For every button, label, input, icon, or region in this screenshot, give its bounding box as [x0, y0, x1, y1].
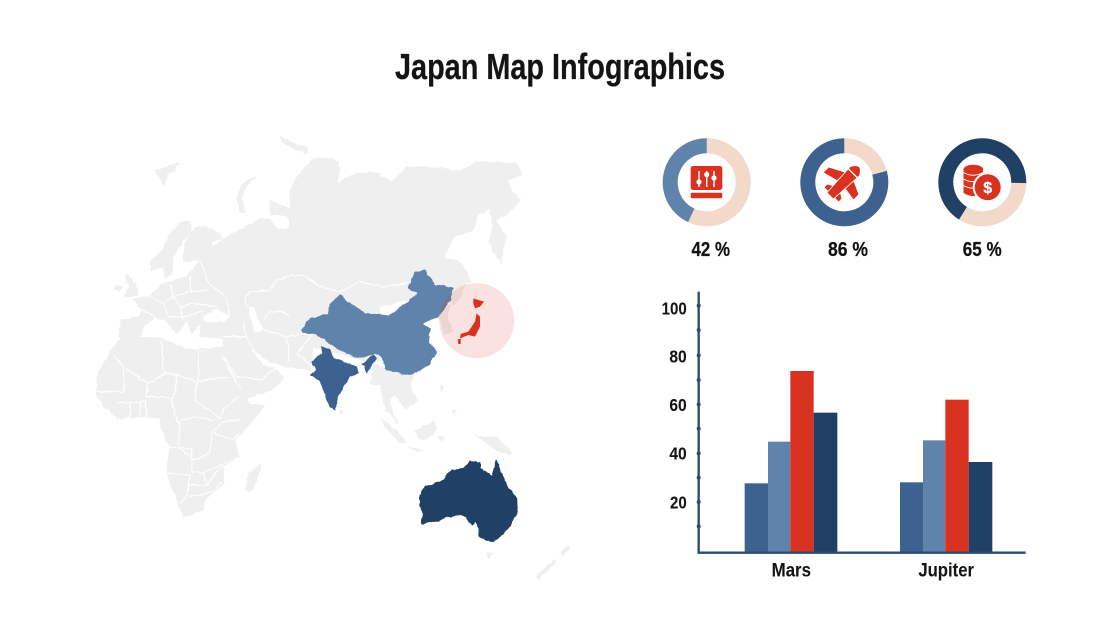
icon: sliders — [691, 166, 722, 198]
map: highlight circle around Japan — [439, 283, 514, 358]
map: Japan — [458, 298, 484, 344]
y axis labels: 80 — [669, 346, 687, 366]
label: 86 %: 86 % — [828, 239, 868, 261]
donut: 65 % — [932, 132, 1033, 233]
y axis labels: 40 — [669, 444, 687, 464]
donut: 42 % — [658, 134, 755, 231]
borders — [142, 260, 380, 380]
map: China — [302, 271, 452, 375]
x axis labels: Mars — [772, 561, 811, 582]
y axis labels: 60 — [669, 395, 687, 415]
label: 65 %: 65 % — [963, 239, 1002, 261]
map: grey land of Africa — [97, 337, 265, 517]
map: grey land of South-East Asia — [338, 362, 418, 420]
title: Japan Map Infographics — [395, 46, 725, 87]
icon: plane — [815, 152, 873, 209]
map: grey land of Europe and Asia — [115, 137, 380, 398]
y axis labels — [662, 298, 687, 512]
map: Australia — [420, 461, 517, 542]
seas cut out of the land — [203, 307, 263, 333]
map: India — [310, 347, 377, 410]
y axis labels: 20 — [670, 492, 687, 512]
x axis labels: Jupiter — [918, 561, 974, 582]
world map — [97, 137, 570, 579]
bars: Jupiter — [900, 400, 992, 552]
axes — [697, 292, 1026, 553]
map: grey islands of Indonesia, Philippines, New Guinea, New Zealand — [380, 380, 570, 579]
map: grey land of East Asia and Russia's far east — [290, 143, 522, 334]
label: 42 %: 42 % — [692, 239, 730, 261]
icon text: dollar sign: $ — [983, 180, 992, 197]
bar chart — [662, 292, 1026, 582]
bars: Mars — [745, 371, 837, 552]
x axis labels — [772, 561, 974, 582]
y axis labels: 100 — [662, 298, 687, 318]
donut: 86 % — [800, 138, 889, 227]
